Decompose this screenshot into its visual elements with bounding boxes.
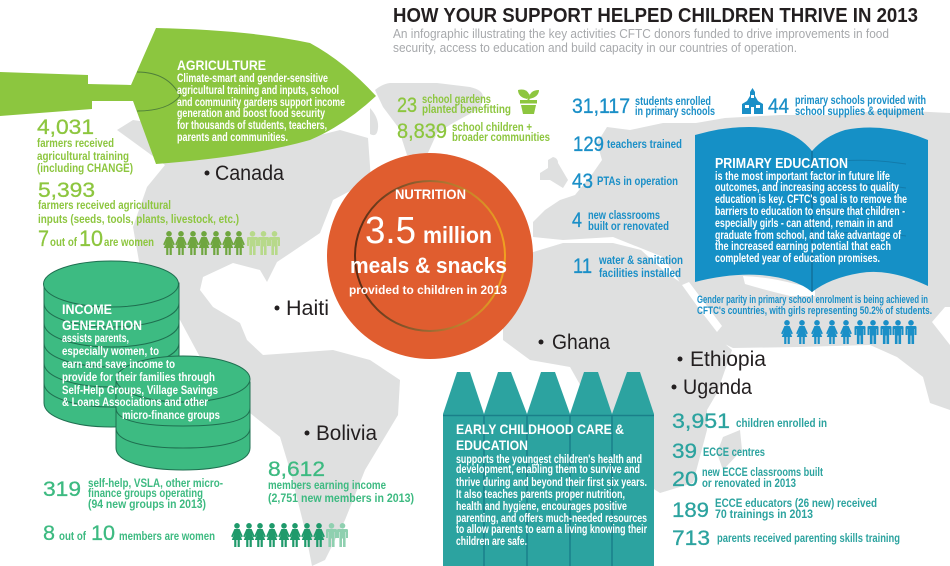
early childhood statistics: parents received parenting skills training [717, 533, 900, 545]
panel: agriculture trowel: for thousands of students, teachers, [177, 120, 327, 132]
agriculture statistics: 5,393 [38, 179, 95, 202]
panel: primary education open book: outcomes, and increasing access to quality [715, 182, 899, 194]
panel: primary education open book [695, 127, 928, 292]
income statistics: 8,612 [268, 458, 325, 481]
agriculture statistics: (including CHANGE) [37, 163, 133, 175]
early childhood statistics: ECCE educators (26 new) received [715, 498, 877, 510]
panel: income generation coins [44, 261, 250, 470]
early childhood statistics: 20 [672, 468, 698, 491]
income statistics: (2,751 new members in 2013) [268, 493, 414, 505]
primary education statistics: new classrooms [588, 210, 660, 222]
garden statistics [397, 94, 550, 144]
panel: income generation coins: micro-finance groups [122, 410, 220, 422]
panel: early childhood pencil fence: parenting, and offers much-needed resources [456, 513, 647, 525]
early childhood statistics: new ECCE classrooms built [702, 467, 823, 479]
income statistics: out of [59, 531, 86, 543]
primary education statistics: 4 [572, 209, 582, 232]
panel: agriculture trowel [0, 28, 376, 164]
agriculture statistics: 7 [38, 226, 49, 251]
panel: income generation coins: GENERATION [62, 317, 142, 333]
panel: early childhood pencil fence: EARLY CHILDHOOD CARE & [456, 421, 624, 437]
panel: early childhood pencil fence: children are safe. [456, 536, 527, 548]
panel: agriculture trowel: generation and boost food security [177, 108, 325, 120]
primary education statistics: water & sanitation [598, 255, 683, 267]
early childhood statistics: or renovated in 2013 [702, 478, 796, 490]
panel: income generation coins: earn and save income to [62, 359, 175, 371]
panel: income generation coins: assists parents, [62, 333, 129, 345]
panel: income generation coins: especially women, to [62, 346, 159, 358]
panel: primary education open book: PRIMARY EDUCATION [715, 155, 848, 172]
primary education statistics: in primary schools [635, 106, 715, 118]
country labels: Bolivia [316, 422, 377, 445]
early childhood statistics: 713 [672, 527, 710, 550]
panel: nutrition plate: provided to children in 2013 [349, 283, 507, 297]
agriculture statistics: out of [50, 237, 77, 249]
primary education statistics: 11 [573, 255, 592, 278]
primary education statistics: students enrolled [635, 96, 711, 108]
panel: agriculture trowel: and community gardens support income [177, 97, 345, 109]
panel: agriculture trowel: parents and communities. [177, 132, 288, 144]
agriculture statistics: farmers received agricultural [38, 200, 171, 212]
agriculture statistics: are women [104, 237, 154, 249]
early childhood statistics [672, 410, 900, 550]
primary education statistics: 43 [572, 170, 593, 193]
agriculture statistics [37, 116, 239, 251]
panel: primary education open book: the increased earning potential that each [715, 241, 891, 253]
early childhood statistics: 3,951 [672, 410, 730, 433]
icon: agriculture people 7 of 10 women [163, 231, 280, 255]
income statistics: finance groups operating [88, 488, 203, 500]
primary education statistics: PTAs in operation [597, 176, 678, 188]
panel: early childhood pencil fence: to allow parents to earn a living knowing their [456, 524, 647, 536]
panel: early childhood pencil fence [443, 372, 654, 566]
agriculture statistics: 4,031 [37, 116, 94, 139]
country labels: Haiti [286, 297, 329, 320]
icon: school house [742, 88, 763, 114]
panel: primary education open book: especially girls - can attend, remain in and [715, 218, 893, 230]
panel: primary education open book: completed year of education promises. [715, 253, 880, 265]
panel: early childhood pencil fence: supports the youngest children's health and [456, 454, 642, 466]
income statistics: self-help, VSLA, other micro- [88, 478, 223, 490]
income statistics: (94 new groups in 2013) [88, 499, 206, 511]
panel: agriculture trowel: AGRICULTURE [177, 57, 266, 73]
agriculture statistics: inputs (seeds, tools, plants, livestock, etc.) [38, 214, 239, 226]
garden statistics: 23 [397, 94, 417, 117]
country labels: Uganda [683, 376, 752, 399]
icon: primary education people [781, 320, 916, 344]
early childhood statistics: 189 [672, 499, 709, 522]
panel: income generation coins: INCOME [62, 301, 112, 317]
primary education statistics: 44 [768, 95, 789, 118]
country labels [204, 162, 766, 445]
panel: nutrition plate [327, 153, 533, 359]
garden statistics: school children + [452, 122, 532, 134]
income statistics: members earning income [268, 480, 386, 492]
primary education statistics: 129 [573, 133, 604, 156]
early childhood statistics: children enrolled in [736, 418, 827, 430]
primary education statistics [572, 95, 926, 280]
primary education statistics: 31,117 [572, 95, 630, 118]
panel: early childhood pencil fence: thrive during and beyond their first six years. [456, 477, 647, 489]
panel: early childhood pencil fence: health and hygiene, encourages positive [456, 501, 627, 513]
panel: income generation coins: & Loans Associations and other [62, 397, 208, 409]
early childhood statistics: 70 trainings in 2013 [715, 509, 813, 521]
country labels: Canada [215, 162, 284, 185]
icon: potted plant [518, 90, 539, 114]
country labels: Ethiopia [690, 348, 766, 371]
early childhood statistics: 39 [672, 440, 697, 463]
panel: nutrition plate: meals & snacks [350, 253, 507, 278]
income statistics: 8 [43, 522, 55, 545]
income statistics: 10 [91, 522, 115, 545]
agriculture statistics: agricultural training [37, 151, 129, 163]
panel: early childhood pencil fence: development, enabling them to survive and [456, 464, 640, 476]
gender parity note [697, 294, 932, 317]
primary education statistics: teachers trained [607, 139, 682, 151]
early childhood statistics: ECCE centres [703, 447, 765, 459]
primary education statistics: school supplies & equipment [795, 106, 924, 118]
subtitle: security, access to education and build capacity in our countries of operation. [393, 40, 797, 55]
panel: primary education open book: is the most important factor in future life [715, 171, 890, 183]
garden statistics: 8,839 [397, 120, 447, 143]
panel: agriculture trowel: agricultural training and inputs, school [177, 85, 339, 97]
panel: income generation coins: provide for their families through [62, 372, 215, 384]
panel: agriculture trowel: Climate-smart and gender-sensitive [177, 73, 328, 85]
garden statistics: broader communities [452, 132, 550, 144]
income statistics [43, 458, 414, 545]
panel: nutrition plate: 3.5 [365, 210, 416, 252]
panel: nutrition plate: NUTRITION [395, 186, 466, 202]
panel: early childhood pencil fence: EDUCATION [456, 437, 528, 453]
income statistics: members are women [119, 531, 215, 543]
title: HOW YOUR SUPPORT HELPED CHILDREN THRIVE IN 2013 [393, 5, 918, 27]
subtitle [393, 26, 889, 55]
agriculture statistics: 10 [79, 226, 103, 251]
panel: early childhood pencil fence: It also teaches parents proper nutrition, [456, 489, 625, 501]
icon: income people 8 of 10 women [231, 523, 348, 547]
income statistics: 319 [43, 478, 81, 501]
primary education statistics: facilities installed [599, 268, 681, 280]
agriculture statistics: farmers received [37, 138, 114, 150]
garden statistics: school gardens [422, 94, 491, 106]
subtitle: An infographic illustrating the key activities CFTC donors funded to drive improvements in food [393, 26, 889, 41]
country labels: Ghana [552, 331, 610, 354]
garden statistics: planted benefitting [422, 104, 511, 116]
panel: income generation coins: Self-Help Groups, Village Savings [62, 385, 218, 397]
world map background [117, 83, 950, 566]
primary education statistics: built or renovated [588, 221, 669, 233]
panel: nutrition plate: million [423, 222, 492, 248]
